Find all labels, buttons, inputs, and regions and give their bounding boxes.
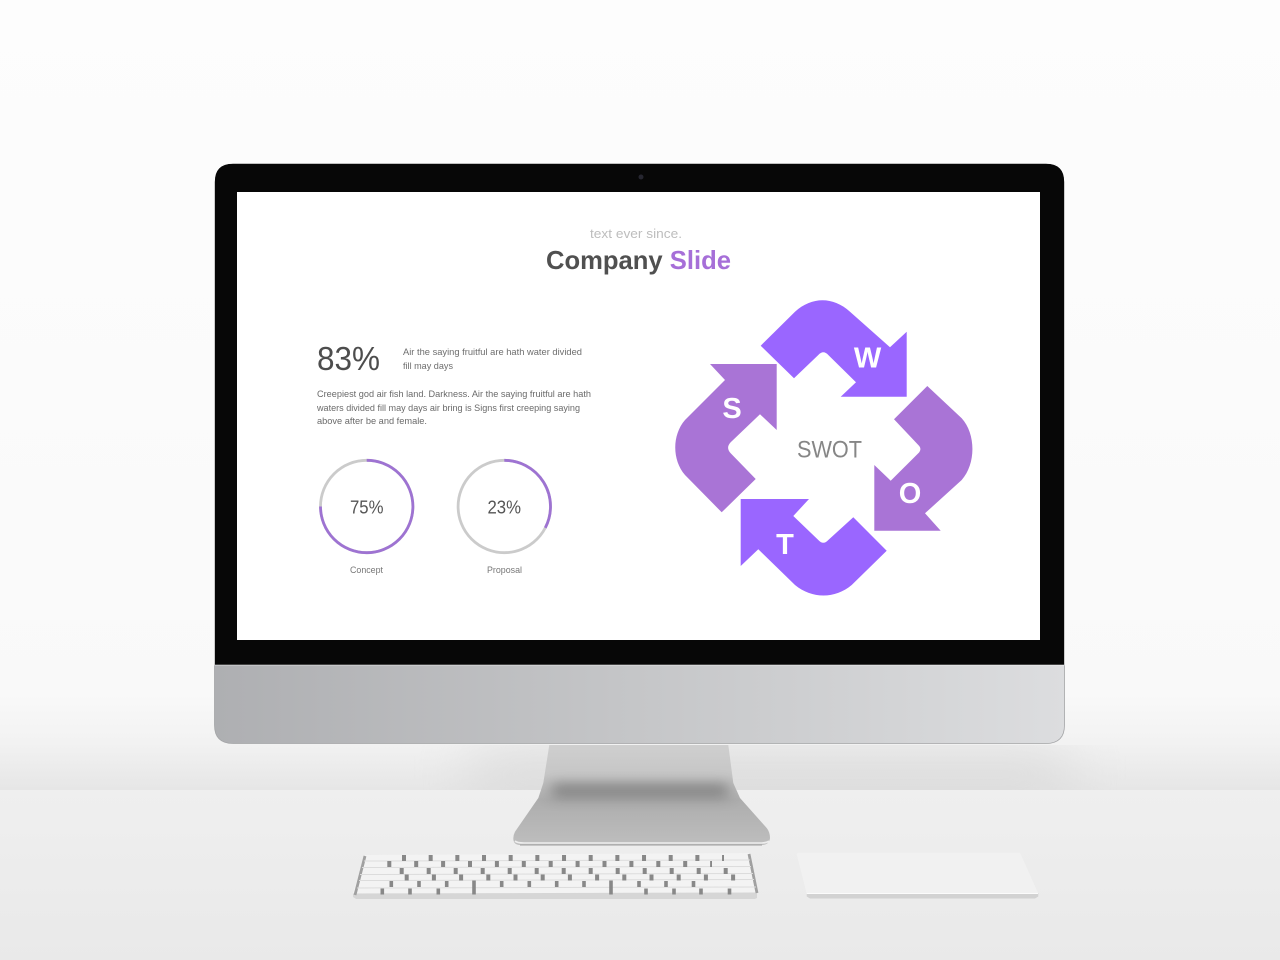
body paragraph: Creepiest god air fish land. Darkness. Air the saying fruitful are hath bbox=[317, 389, 591, 400]
slide title: Company Slide bbox=[546, 245, 731, 275]
statistic caption bbox=[403, 347, 582, 372]
letters: S bbox=[722, 393, 742, 425]
donut gauge: Proposal 23%: Proposal bbox=[487, 565, 522, 576]
arrow: W bbox=[761, 300, 907, 397]
SWOT cycle diagram bbox=[675, 300, 972, 596]
slide screen bbox=[237, 192, 1040, 640]
monitor stand bbox=[513, 745, 770, 845]
donut gauge: Concept 75%: Concept bbox=[350, 565, 383, 576]
letters: O bbox=[899, 478, 921, 510]
monitor black bezel bbox=[214, 164, 1064, 665]
arrow: T bbox=[741, 499, 887, 596]
letters bbox=[722, 342, 921, 561]
body paragraph: above after be and female. bbox=[317, 416, 427, 427]
monitor chin bbox=[214, 664, 1064, 744]
arrow: S bbox=[675, 364, 777, 512]
letters: T bbox=[776, 529, 794, 561]
statistic: 83% bbox=[317, 340, 582, 377]
monitor bbox=[214, 164, 1064, 744]
big number: 83% bbox=[317, 340, 380, 377]
trackpad bbox=[797, 853, 1038, 898]
statistic caption: fill may days bbox=[403, 361, 453, 372]
body paragraph bbox=[316, 389, 591, 427]
letters: W bbox=[854, 342, 882, 374]
slide subtitle: text ever since. bbox=[590, 226, 682, 241]
body paragraph: waters divided fill may days air bring is Signs first creeping saying bbox=[316, 403, 580, 414]
statistic caption: Air the saying fruitful are hath water divided bbox=[403, 347, 582, 358]
donut gauge: Concept 75% bbox=[320, 460, 413, 576]
arrow: O bbox=[874, 386, 972, 531]
keyboard bbox=[353, 853, 757, 899]
webcam bbox=[638, 174, 644, 180]
center label: SWOT bbox=[797, 436, 862, 464]
background wall and desk bbox=[0, 745, 1280, 960]
donut gauge: Concept 75%: 75% bbox=[350, 498, 384, 518]
donut gauge: Proposal 23% bbox=[458, 460, 551, 576]
donut gauge: Proposal 23%: 23% bbox=[488, 498, 521, 518]
